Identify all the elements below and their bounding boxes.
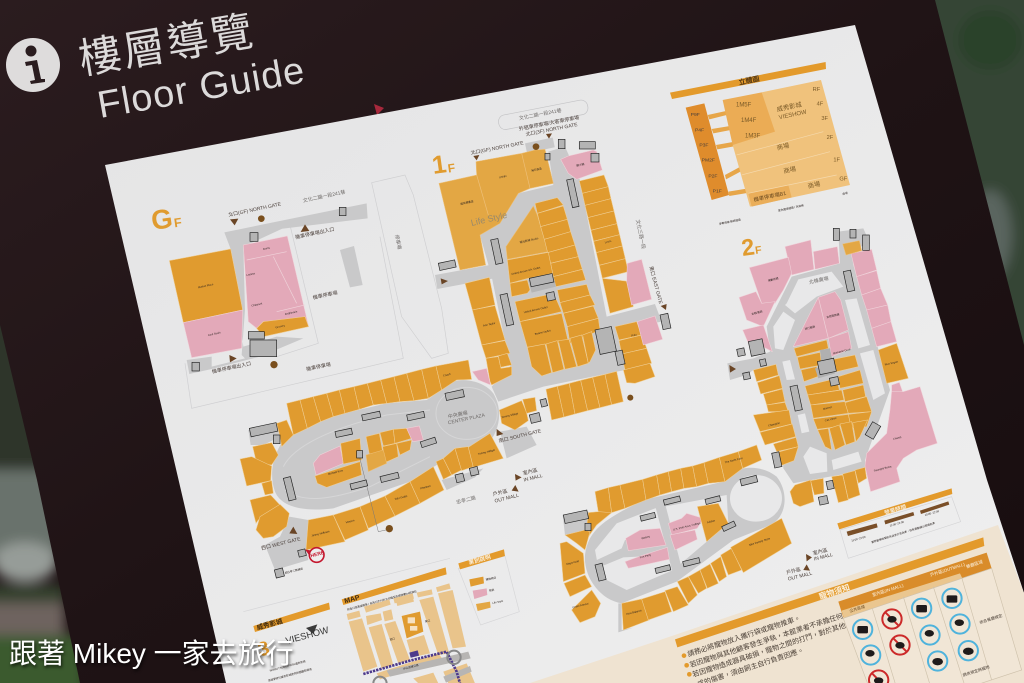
1F labels: Uniqlo bbox=[499, 174, 507, 179]
parking column: PM2F bbox=[702, 158, 715, 164]
mall floors: 機車停車場B1 bbox=[753, 189, 787, 204]
hours pills: 實際營業時間依各店家公告為準，如有異動請以現場為準 bbox=[871, 521, 936, 544]
legend bbox=[458, 549, 505, 611]
1F labels: 北口(3F) NORTH GATE bbox=[525, 121, 579, 138]
parking column: P2F bbox=[708, 173, 717, 179]
pet allowed icons bbox=[853, 589, 978, 671]
mall floors: 1F bbox=[833, 157, 840, 163]
pet rule table bbox=[838, 553, 1022, 683]
2F oval labels: Fun Party bbox=[639, 552, 652, 559]
2F heading: 2 bbox=[740, 233, 756, 261]
2F oval labels: New Balance bbox=[626, 608, 643, 616]
2F labels: 北棟廣場 bbox=[808, 275, 829, 286]
1F oval labels: Phantom bbox=[420, 484, 432, 490]
2F labels: Mandarin Duck bbox=[833, 347, 852, 355]
1F oval labels: Vanson bbox=[345, 518, 355, 524]
vieshow panel: 威秀影城 bbox=[256, 616, 284, 632]
2F labels: Champion bbox=[768, 421, 781, 428]
2F oval labels: Adidas bbox=[707, 518, 716, 524]
pet notice rules: 若因寵物造成器具破損，寵物之間的打鬥，對於其他顧客造 bbox=[691, 614, 867, 679]
dog silhouettes bbox=[857, 595, 974, 683]
1F heading: F bbox=[447, 161, 456, 176]
parking column bbox=[686, 103, 749, 200]
GF labels: 停車場 bbox=[393, 234, 403, 250]
hours outline bbox=[840, 497, 961, 558]
GF labels: 機車停車場出入口 bbox=[295, 226, 335, 241]
2F oval labels: Wolsey bbox=[641, 534, 651, 540]
mall floors bbox=[723, 80, 850, 207]
2F oval labels: OUT MALL bbox=[787, 571, 813, 583]
GF labels: 機車停車場出入口 bbox=[211, 360, 252, 375]
1F labels: Beams Outlet bbox=[534, 328, 551, 336]
location map: 西口 bbox=[389, 636, 396, 642]
pet notice title bar bbox=[675, 537, 984, 647]
1F oval labels: CENTER PLAZA bbox=[447, 412, 486, 426]
2F oval labels: The North Face bbox=[724, 456, 744, 464]
mall floors: 2F bbox=[827, 135, 834, 141]
floor plan: 1F upper bbox=[430, 99, 671, 420]
1F oval labels: IN MALL bbox=[523, 473, 543, 484]
location map bbox=[342, 567, 475, 683]
mall floors: 3F bbox=[821, 116, 828, 122]
1F oval labels: 西口 WEST GATE bbox=[261, 536, 302, 552]
legend: Life Style bbox=[492, 599, 504, 605]
1F oval labels: R&J Outlet bbox=[394, 494, 408, 501]
1F labels: United Arrows UA. Outlet bbox=[511, 265, 541, 276]
here marker: HERE bbox=[310, 550, 326, 559]
1F walkways bbox=[435, 137, 662, 402]
mall floors: 1M4F bbox=[741, 118, 757, 124]
pet rule table: 依各餐廳規定 bbox=[978, 612, 1003, 625]
2F oval west and south shops bbox=[560, 512, 792, 630]
GF labels: 機車停車場 bbox=[312, 289, 338, 301]
mall floors: 商場 bbox=[807, 179, 822, 190]
hours panel bbox=[675, 488, 1022, 683]
1F lifestyle area bbox=[439, 149, 553, 270]
1F labels: 文化二路一段241巷 bbox=[518, 107, 562, 122]
1F oval labels: Jimmy Hoffman bbox=[311, 529, 330, 538]
1F labels: United Arrows Outlet bbox=[523, 305, 548, 314]
2F heading: F bbox=[754, 244, 763, 257]
floor plan: GF bbox=[149, 175, 448, 408]
1F oval labels: Tommy Hilfiger bbox=[478, 448, 496, 456]
vieshow panel: 高雄夢時代威秀影城提供舒適觀影環境 bbox=[268, 667, 313, 683]
GF labels: Grocery bbox=[275, 323, 286, 329]
1F oval labels: 忠孝二路 bbox=[455, 494, 476, 506]
GF labels: 機車停車場 bbox=[306, 361, 331, 373]
floor plan: 2F lower oval bbox=[560, 445, 834, 632]
GF labels: Chilanvel bbox=[251, 301, 263, 308]
hours title bar: 營業時間 bbox=[883, 503, 908, 517]
2F pink shops bbox=[739, 240, 937, 492]
watermark caption: 跟著 Mikey 一家去旅行 bbox=[9, 638, 294, 669]
vieshow panel: VIESHOW bbox=[285, 625, 330, 646]
title: Chinese: 樓層導覽 bbox=[76, 7, 256, 83]
pet rule table: 室內區(IN MALL) bbox=[871, 582, 905, 599]
elevation title bar: 立體圖 bbox=[738, 74, 760, 87]
1F labels: Ann Taylor bbox=[483, 321, 496, 328]
2F labels: Marmot bbox=[823, 405, 833, 411]
location map: 自南口搭乘接駁車 / 自西口步行約五分鐘至高雄捷運R4凱旋站 bbox=[347, 589, 417, 612]
2F labels: Cas Vieux bbox=[824, 416, 838, 423]
1F oval gate markers and icons bbox=[249, 390, 548, 578]
parking column: P9F bbox=[691, 112, 700, 118]
location map: MAP bbox=[344, 594, 361, 605]
1F labels bbox=[460, 99, 664, 338]
1F oval labels: OUT MALL bbox=[494, 493, 520, 505]
GF heading: G bbox=[149, 202, 175, 236]
location map: 中山高速公路 bbox=[403, 663, 419, 671]
title: English: Floor Guide bbox=[94, 50, 307, 127]
1F gate markers and icons bbox=[438, 133, 671, 401]
1F labels: 銀火鍋 bbox=[576, 162, 585, 168]
elevation title bar bbox=[670, 62, 826, 99]
1F labels: 東口 EAST GATE bbox=[647, 265, 664, 305]
hours pills: 11:00~22:00 bbox=[851, 535, 867, 543]
parking column: P4F bbox=[695, 128, 704, 134]
1F south row shops bbox=[306, 397, 537, 550]
1F labels: Polo bbox=[631, 332, 638, 338]
vieshow panel: 3 bbox=[256, 637, 272, 661]
2F gate and icons bbox=[729, 228, 881, 505]
vieshow panel: WOMUTSUBIO PARK威秀影城 bbox=[269, 659, 306, 673]
pet rule table: 公共區域 bbox=[848, 603, 865, 614]
1F labels: 無印良品 bbox=[531, 166, 543, 173]
1F west shops bbox=[240, 420, 293, 538]
2F oval labels: Under Armour bbox=[572, 601, 589, 609]
elevation captions: 停車場棟 聯絡通道 bbox=[719, 217, 741, 226]
1F oval labels: Tommy Village bbox=[501, 411, 519, 419]
GF labels: 文化二路一段241巷 bbox=[302, 188, 346, 204]
here marker bbox=[305, 548, 326, 562]
mall floors: 商場 bbox=[776, 140, 791, 152]
GF labels: Anghinarie bbox=[284, 309, 298, 316]
1F heading: 1 bbox=[430, 150, 448, 180]
2F oval labels bbox=[566, 456, 834, 616]
1F oval labels: 南口 SOUTH GATE bbox=[498, 427, 543, 445]
1F labels: 外租車停車場/大客車停車場 bbox=[518, 114, 580, 133]
1F labels: 陽光影城 Studio bbox=[519, 236, 539, 244]
2F oval walkway bbox=[563, 468, 785, 632]
1F oval labels bbox=[261, 372, 543, 575]
2F labels: Chanel bbox=[893, 435, 902, 441]
1F north row shops bbox=[287, 360, 491, 435]
1F west column shops bbox=[465, 277, 512, 385]
mall floors: 1M5F bbox=[736, 103, 752, 109]
2F labels: 流行服飾 bbox=[804, 324, 816, 331]
hours pills: 10:00~22:00 bbox=[924, 509, 940, 517]
pet notice title bar: 寵物須知 bbox=[818, 582, 851, 601]
mall floors: GF bbox=[839, 177, 848, 183]
2F labels: 女性服飾館 bbox=[826, 312, 840, 319]
mall floors: 威秀影城 bbox=[776, 99, 803, 114]
pet rule table: 戶外區(OUTMALL) bbox=[929, 561, 966, 579]
floor plan: 2F upper bbox=[727, 228, 937, 507]
hours pills bbox=[847, 501, 949, 544]
1F oval labels: 前往孝二路通道 bbox=[284, 566, 304, 575]
panel outlines bbox=[243, 556, 519, 625]
elevation captions: 室內連接通道 / 百貨棟 bbox=[778, 203, 804, 213]
floor plan: 1F lower oval bbox=[240, 360, 548, 578]
pet notice rules: 請務必將寵物放入攜行袋或寵物推車。 bbox=[686, 613, 802, 659]
2F labels: Plus Vogue bbox=[884, 359, 899, 367]
mall floors: 4F bbox=[817, 101, 824, 107]
mall floors: VIESHOW bbox=[778, 109, 808, 121]
1F labels: Levi's bbox=[604, 239, 612, 244]
elevation diagram bbox=[670, 62, 850, 226]
1F south row shops bbox=[546, 371, 623, 420]
GF labels: Azul Sushi bbox=[208, 330, 221, 337]
1F center block shops bbox=[507, 198, 600, 376]
1F oval labels: Coach bbox=[443, 372, 452, 378]
mall floors: 1M3F bbox=[745, 133, 761, 139]
pet notice rules: 若因寵物與其他顧客發生爭執，本館業者不承擔任何責任。 bbox=[688, 605, 864, 669]
1F labels: 諾貝爾書店 bbox=[460, 199, 474, 206]
parking column: P1F bbox=[713, 189, 722, 195]
GF labels bbox=[198, 188, 403, 375]
2F labels bbox=[751, 275, 902, 473]
legend: 餐飲 bbox=[489, 588, 495, 593]
vieshow panel bbox=[253, 603, 330, 683]
1F oval labels: 戶外區 bbox=[492, 488, 508, 498]
1F lifestyle area: Life Style bbox=[470, 210, 508, 228]
2F oval labels: Nike Factory Store bbox=[748, 536, 771, 547]
GF shops bbox=[169, 236, 309, 358]
hours title bar bbox=[837, 488, 952, 529]
legend: 業別說明 bbox=[468, 553, 492, 567]
1F oval center island shops bbox=[313, 426, 423, 487]
1F east column shops bbox=[561, 150, 663, 383]
GF labels: Lastina bbox=[246, 271, 256, 277]
pet prohibited icons bbox=[869, 609, 910, 683]
mall floors: RF bbox=[813, 87, 821, 93]
2F labels: 運動休閒 bbox=[768, 276, 779, 283]
2F oval labels: IN MALL bbox=[813, 552, 834, 563]
2F oval labels: 戶外區 bbox=[785, 566, 802, 576]
2F oval labels: Maya Gold bbox=[566, 559, 580, 566]
elevation captions bbox=[719, 191, 848, 226]
red pin bbox=[374, 104, 384, 115]
1F oval walkway bbox=[248, 380, 537, 570]
hours pills: 11:00~22:00 bbox=[889, 520, 905, 528]
pet rule table: 餐廳區域 bbox=[965, 558, 984, 570]
GF labels: Market Place bbox=[198, 282, 214, 289]
GF gate markers and icons bbox=[192, 207, 346, 371]
2F labels: Saungeti Boma bbox=[873, 464, 892, 473]
2F oval labels: 室內區 bbox=[812, 547, 828, 557]
pet rule table: 請依規定將寵物 bbox=[962, 663, 990, 678]
GF labels: 北口(GF) NORTH GATE bbox=[228, 200, 282, 219]
elevation captions: 商場 bbox=[842, 191, 848, 196]
1F labels: 北口(GF) NORTH GATE bbox=[470, 139, 525, 157]
GF labels: Doms bbox=[263, 245, 271, 251]
bottom left panels bbox=[243, 549, 519, 683]
location map: 東口 bbox=[425, 618, 431, 624]
1F oval labels: 中央廣場 bbox=[447, 409, 468, 420]
2F orange shops bbox=[753, 241, 908, 507]
2F oval labels: U.S. Polo Assn. College bbox=[673, 521, 701, 532]
2F walkways bbox=[727, 228, 890, 483]
1F oval labels: 室內區 bbox=[522, 467, 538, 477]
2F oval markers and icons bbox=[563, 475, 812, 581]
beige pet section background bbox=[530, 525, 1024, 683]
GF outlines bbox=[185, 175, 448, 408]
icon: information circle bbox=[6, 38, 60, 92]
parking column: P3F bbox=[699, 143, 708, 149]
legend: 購物商店 bbox=[485, 575, 497, 582]
2F labels: 女裝/童裝 bbox=[751, 309, 763, 316]
1F labels: 文化三路一段 bbox=[634, 219, 647, 250]
mall floors: 商場 bbox=[783, 164, 797, 175]
1F heading bbox=[430, 150, 456, 180]
2F oval north row shops bbox=[595, 445, 762, 518]
GF walkways bbox=[187, 203, 368, 374]
1F oval labels: Michael Kors bbox=[328, 468, 344, 476]
2F oval island shops bbox=[625, 503, 728, 568]
GF heading: F bbox=[173, 215, 183, 230]
